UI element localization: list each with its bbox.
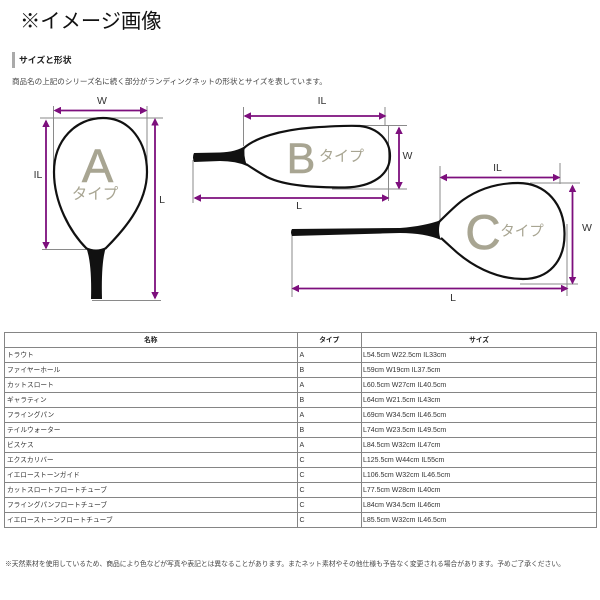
- size table: L106.5cm W32cm IL46.5cm: [363, 472, 450, 478]
- size table: L85.5cm W32cm IL46.5cm: [363, 516, 446, 524]
- label: C IL: IL: [493, 162, 502, 174]
- size table: サイズ: [469, 336, 489, 344]
- letter C: C: [465, 206, 501, 260]
- size table: フライングパンフロートチューブ: [7, 502, 107, 508]
- size table: カットスロートフロートチューブ: [7, 486, 107, 494]
- label: B L: L: [296, 200, 302, 212]
- size table: カットスロート: [7, 382, 54, 388]
- size table: テイルウォーター: [7, 426, 60, 434]
- label: C type: タイプ: [500, 223, 544, 240]
- size table: C: [300, 516, 305, 524]
- arrow: A inner length: [45, 121, 47, 248]
- label: A type: タイプ: [72, 185, 119, 203]
- size table: A: [300, 382, 304, 388]
- size table: L64cm W21.5cm IL43cm: [363, 396, 440, 404]
- size table: ファイヤーホール: [7, 366, 60, 374]
- diagram: type B net: [193, 95, 413, 212]
- size table: フライングパン: [7, 412, 54, 418]
- size table: C: [300, 502, 305, 508]
- size table: L69cm W34.5cm IL46.5cm: [363, 412, 446, 418]
- size table: ギャラティン: [7, 396, 47, 404]
- size table: イエローストーンガイド: [7, 472, 80, 478]
- diagram: type A net: [34, 95, 165, 300]
- size table: L60.5cm W27cm IL40.5cm: [363, 382, 446, 388]
- arrow: B inner length: [245, 115, 385, 117]
- size table: A: [300, 412, 304, 418]
- label: B W: W: [403, 150, 413, 162]
- label: C W: W: [582, 222, 592, 234]
- arrow: A width: [55, 110, 146, 112]
- arrow: B total length: [195, 197, 388, 199]
- arrow: C inner length: [441, 176, 559, 178]
- label: B IL: IL: [318, 95, 327, 107]
- size table: L54.5cm W22.5cm IL33cm: [363, 352, 446, 358]
- size table: [4, 332, 597, 528]
- title: ※イメージ画像: [20, 11, 162, 33]
- size table: L84cm W34.5cm IL46cm: [363, 502, 440, 508]
- letter A: A: [82, 139, 114, 192]
- arrow: A total length: [154, 120, 156, 298]
- size table: L59cm W19cm IL37.5cm: [363, 366, 440, 374]
- size table: B: [300, 366, 304, 374]
- size table: L125.5cm W44cm IL55cm: [363, 456, 444, 464]
- size table: C: [300, 486, 305, 494]
- size table: 名称: [144, 336, 157, 344]
- label: B type: タイプ: [319, 148, 364, 165]
- size table: L84.5cm W32cm IL47cm: [363, 442, 440, 448]
- size table: B: [300, 396, 304, 404]
- arrow: C total length: [293, 288, 567, 290]
- arrow: B width: [398, 128, 400, 188]
- footnote: ※天然素材を使用しているため、商品により色などが写真や表記とは異なることがあります。またネット素材やその他仕様も予告なく変更される場合があります。予めご了承ください。: [5, 561, 565, 568]
- size table: C: [300, 472, 305, 478]
- section marker bar: [12, 52, 15, 68]
- diagrams of net types: [34, 95, 592, 304]
- size table: L74cm W23.5cm IL49.5cm: [363, 426, 446, 434]
- label: C L: L: [450, 292, 456, 304]
- description text: 商品名の上記のシリーズ名に続く部分がランディングネットの形状とサイズを表しています。: [12, 77, 327, 86]
- size table: C: [300, 456, 305, 464]
- size table: A: [300, 442, 304, 448]
- size table: ビスケス: [7, 442, 34, 448]
- diagram: type C net: [291, 162, 592, 304]
- size table: イエローストーンフロートチューブ: [7, 516, 113, 524]
- arrow: C width: [572, 186, 574, 283]
- label: A L: L: [159, 194, 165, 206]
- label: A IL: IL: [34, 169, 43, 181]
- size table: タイプ: [319, 336, 339, 344]
- size table: A: [300, 352, 304, 358]
- size table: B: [300, 426, 304, 434]
- heading: size and shape: サイズと形状: [19, 55, 72, 65]
- size table: L77.5cm W28cm IL40cm: [363, 486, 440, 494]
- letter B: B: [287, 135, 315, 183]
- size table: エクスカリバー: [7, 456, 54, 464]
- label: A W: W: [97, 95, 107, 107]
- size table: トラウト: [7, 352, 34, 358]
